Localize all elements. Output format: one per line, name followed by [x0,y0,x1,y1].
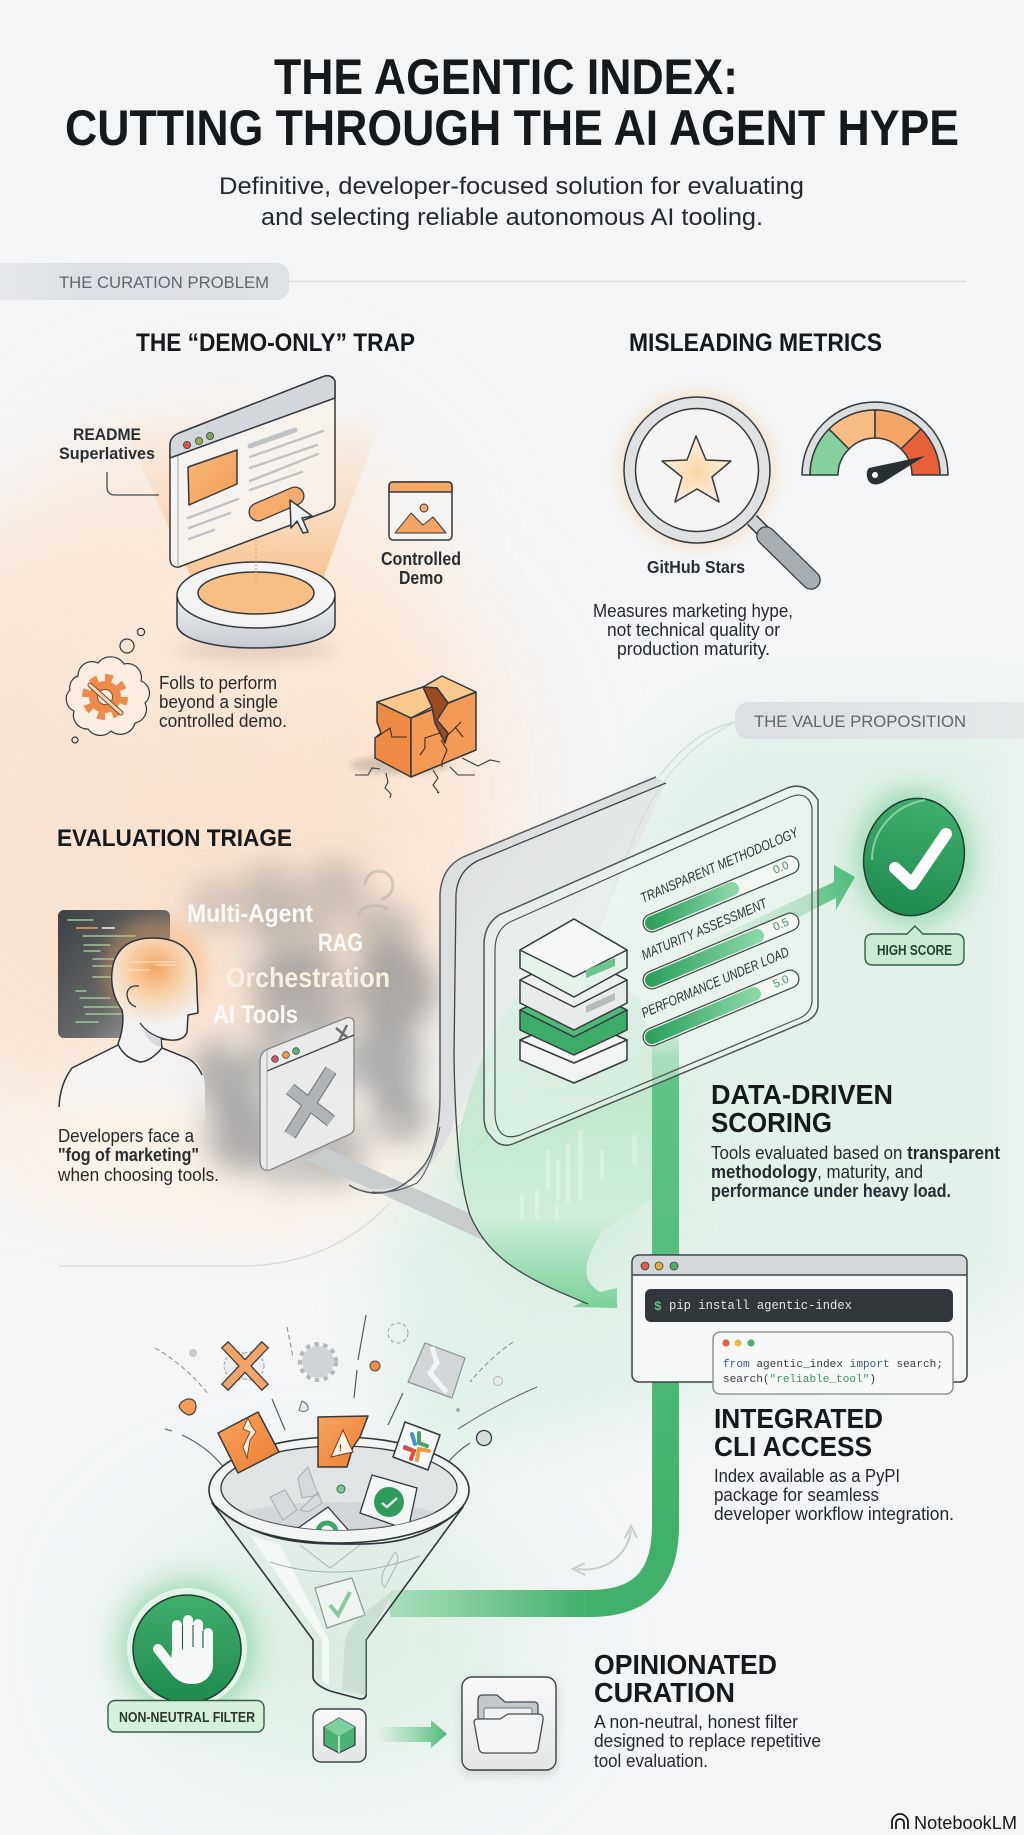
decorative panel outline [59,1203,390,1266]
icon: code screen [58,910,170,1038]
python snippet window [713,1332,953,1394]
colourful logo tile [393,1422,440,1470]
section tag: the value proposition: THE VALUE PROPOSITION [754,712,966,731]
github stars label: GitHub Stars [647,557,745,577]
inner sheet line to cli [454,783,666,1304]
subtitle: Definitive, developer-focused solution for evaluating [219,173,804,200]
section tag: the curation problem: THE CURATION PROBLEM [59,273,269,292]
panel: misleading metrics illustration [593,392,948,659]
integrated cli heading: CLI ACCESS [714,1431,872,1462]
opinionated curation description: A non-neutral, honest filter [594,1712,798,1732]
metric bar: maturity assessment: 0.5 [771,916,791,934]
green pipeline connector [390,1030,679,1604]
high score label: HIGH SCORE [877,943,952,959]
arrow to high score [700,865,855,965]
readme label: Superlatives [59,444,155,463]
fog word labels: Orchestration [226,962,390,993]
fog word labels: RAG [318,929,363,957]
title: THE AGENTIC INDEX: [274,49,738,105]
platform [176,562,336,660]
developers caption [57,1126,219,1185]
icon: stop hand [133,1595,241,1703]
controlled demo icon [389,482,452,540]
readme label [59,425,159,495]
filter label [108,1700,264,1732]
warning orange tile [318,1416,368,1467]
metrics caption: not technical quality or [607,620,780,640]
icon tiles at funnel top [218,1412,440,1473]
integrated cli description: Index available as a PyPI [714,1466,900,1486]
opinionated curation description: designed to replace repetitive [594,1731,821,1751]
install command bar: pip install agentic-index [669,1299,852,1313]
icon: magnifier over star [619,392,811,580]
failure caption: controlled demo. [159,711,287,731]
glass scoring panel [484,786,818,1145]
data-driven description [711,1143,1000,1201]
fog word labels: AI Tools [213,1001,298,1029]
metric bar: performance under load [639,943,791,1037]
integrated cli heading [714,1403,883,1462]
integrated cli description [714,1466,954,1524]
integrated cli description: package for seamless [714,1485,879,1505]
developers caption: "fog of marketing" [58,1145,199,1165]
subtitle: and selecting reliable autonomous AI tooling. [261,204,763,231]
metric bar: transparent methodology [638,824,802,923]
high score label [865,926,964,965]
browser window [170,376,335,567]
metric bar: performance under load: 5.0 [771,973,791,991]
integrated cli heading: INTEGRATED [714,1403,883,1434]
opinionated curation heading: OPINIONATED [594,1649,777,1680]
icon: developer figure [59,918,207,1130]
funnel cone [212,1503,463,1699]
heading: evaluation triage: EVALUATION TRIAGE [57,825,292,852]
projector beam [120,410,385,592]
arrow to folder [377,1720,447,1748]
cracked orange tile [218,1412,279,1473]
metric bar: transparent methodology: TRANSPARENT METHODOLOGY [638,824,802,906]
funnel back rim [209,1437,469,1543]
heading: misleading metrics: MISLEADING METRICS [629,329,882,357]
developers caption: Developers face a [58,1126,195,1146]
metric bar: maturity assessment: MATURITY ASSESSMENT [639,894,770,963]
icon: filtered cube tile [313,1709,366,1762]
data-driven description: methodology, maturity, and [711,1162,923,1182]
fog word labels: Multi-Agent [187,900,314,928]
icon: folder tile [462,1677,556,1770]
panel: evaluation triage illustration [57,858,492,1244]
controlled demo label [381,549,461,588]
controlled demo label: Demo [399,568,443,588]
non-neutral filter badge [108,1580,264,1732]
metrics caption: Measures marketing hype, [593,601,793,621]
controlled demo label: Controlled [381,549,461,569]
integrated cli description: developer workflow integration. [714,1504,954,1524]
icon: gauge [802,402,948,484]
readme label: README [73,425,141,444]
curled sheet [349,722,735,1193]
section tag: the curation problem [0,263,966,300]
notebooklm watermark: NotebookLM [914,1812,1017,1833]
icon: high score check badge [853,789,975,925]
icon: cracked block [350,676,500,798]
heading: demo-only trap: THE “DEMO-ONLY” TRAP [136,329,415,357]
subtitle [219,173,804,231]
warning orange tile: ! [339,1443,342,1453]
metrics caption: production maturity. [617,639,770,659]
faded user icon in fog [358,871,393,915]
install command bar: $ [654,1299,662,1314]
opinionated curation description: tool evaluation. [594,1751,708,1771]
fog word labels [187,900,390,1029]
title [65,49,959,156]
data-driven description: performance under heavy load. [711,1181,951,1201]
section tag: the value proposition [660,702,1024,775]
fog cloud [187,858,437,1190]
failure caption: Folls to perform [159,673,277,693]
python snippet window: from agentic_index import search; [723,1359,943,1371]
icon: rejected browser window [260,1018,354,1170]
icon: feedback loop arrow [573,1526,637,1575]
thought bubble with broken gear [66,628,149,743]
panel: data-driven scoring illustration [349,722,1000,1604]
metric bar: transparent methodology: 0.0 [771,859,791,877]
tiles inside funnel [242,1466,436,1530]
developers caption: when choosing tools. [57,1165,219,1185]
metric bar: maturity assessment [639,894,791,980]
faint bar chart [520,1130,637,1220]
opinionated curation heading [594,1649,777,1708]
data-driven heading: SCORING [711,1107,832,1138]
panel: cli access window [632,1255,967,1394]
data-driven heading: DATA-DRIVEN [711,1079,893,1110]
panel: opinionated curation funnel [155,1315,537,1699]
opinionated curation heading: CURATION [594,1677,735,1708]
filter label: NON-NEUTRAL FILTER [119,1709,255,1726]
install command bar [645,1289,953,1322]
failure caption [159,673,287,731]
data-driven description: Tools evaluated based on transparent [711,1143,1000,1163]
metrics caption [593,601,793,659]
data-driven heading [711,1079,893,1138]
light green swoosh arrow [455,1050,652,1308]
server stack icon [520,919,627,1083]
gray falling streak [306,1148,492,1244]
flying debris [155,1315,537,1500]
opinionated curation description [594,1712,821,1771]
failure caption: beyond a single [159,692,278,712]
python snippet window: search("reliable_tool") [723,1374,876,1386]
panel: demo-only trap illustration [59,376,500,798]
metric bar: performance under load: PERFORMANCE UNDER LOAD [639,943,791,1021]
